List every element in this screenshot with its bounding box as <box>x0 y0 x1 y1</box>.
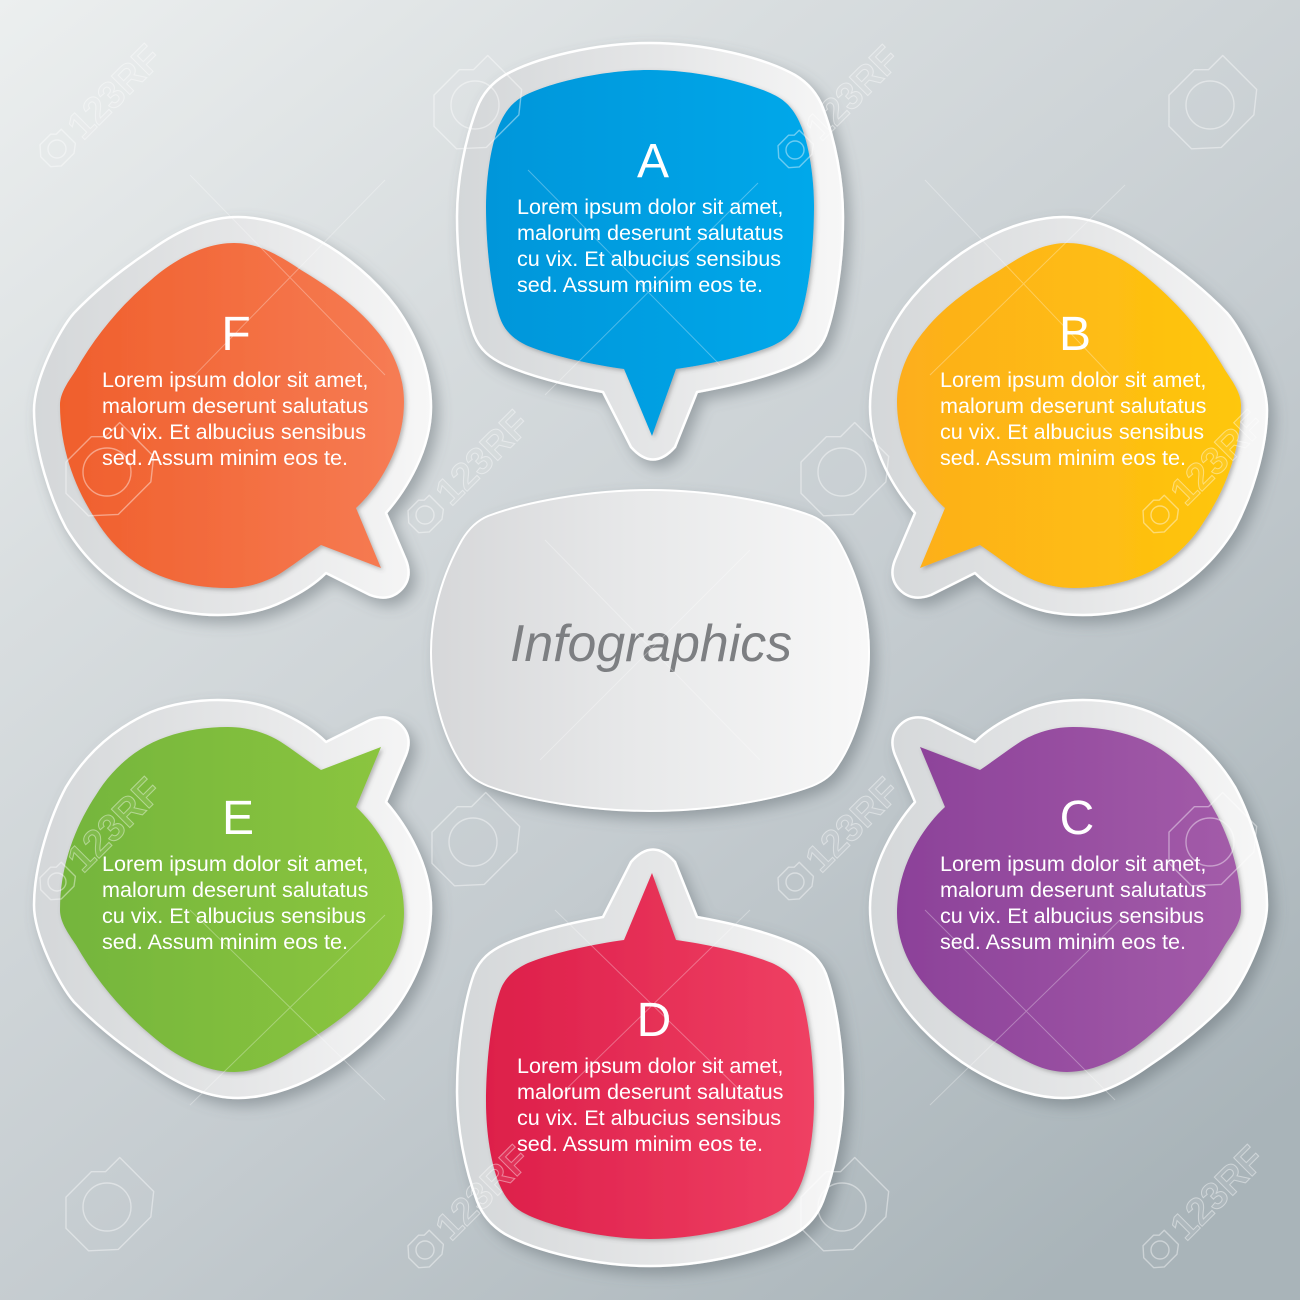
text block: C: malorum deserunt salutatus <box>940 877 1207 902</box>
heading: B: B <box>1059 308 1091 361</box>
text block: A: sed. Assum minim eos te. <box>517 272 763 297</box>
text block: D: malorum deserunt salutatus <box>517 1079 784 1104</box>
heading: E: E <box>222 792 254 845</box>
text block: B: cu vix. Et albucius sensibus <box>940 419 1204 444</box>
text block: E: Lorem ipsum dolor sit amet, <box>102 851 368 876</box>
text block: A: malorum deserunt salutatus <box>517 220 784 245</box>
text block: C: Lorem ipsum dolor sit amet, <box>940 851 1206 876</box>
text block: C: sed. Assum minim eos te. <box>940 929 1186 954</box>
text block: F: Lorem ipsum dolor sit amet, <box>102 367 368 392</box>
text block: D: cu vix. Et albucius sensibus <box>517 1105 781 1130</box>
text block: B: sed. Assum minim eos te. <box>940 445 1186 470</box>
text block: F: sed. Assum minim eos te. <box>102 445 348 470</box>
panel: D <box>457 850 843 1266</box>
text block: D: sed. Assum minim eos te. <box>517 1131 763 1156</box>
panel: E <box>34 700 431 1098</box>
panel: center Infographics <box>431 490 869 811</box>
heading: F: F <box>221 308 251 361</box>
text block: E: malorum deserunt salutatus <box>102 877 369 902</box>
text block: B: malorum deserunt salutatus <box>940 393 1207 418</box>
panel: A <box>457 43 843 460</box>
text block: A: cu vix. Et albucius sensibus <box>517 246 781 271</box>
panel: B <box>870 217 1267 615</box>
text block: F: malorum deserunt salutatus <box>102 393 369 418</box>
panel: F <box>34 217 431 615</box>
panel: C <box>870 700 1267 1098</box>
heading: D: D <box>637 994 671 1047</box>
heading: A: A <box>637 135 669 188</box>
text block: E: sed. Assum minim eos te. <box>102 929 348 954</box>
heading: C: C <box>1060 792 1094 845</box>
text block: D: Lorem ipsum dolor sit amet, <box>517 1053 783 1078</box>
text block: F: cu vix. Et albucius sensibus <box>102 419 366 444</box>
text block: C: cu vix. Et albucius sensibus <box>940 903 1204 928</box>
text block: A: Lorem ipsum dolor sit amet, <box>517 194 783 219</box>
text block: E: cu vix. Et albucius sensibus <box>102 903 366 928</box>
title: Infographics <box>510 615 792 673</box>
text block: B: Lorem ipsum dolor sit amet, <box>940 367 1206 392</box>
